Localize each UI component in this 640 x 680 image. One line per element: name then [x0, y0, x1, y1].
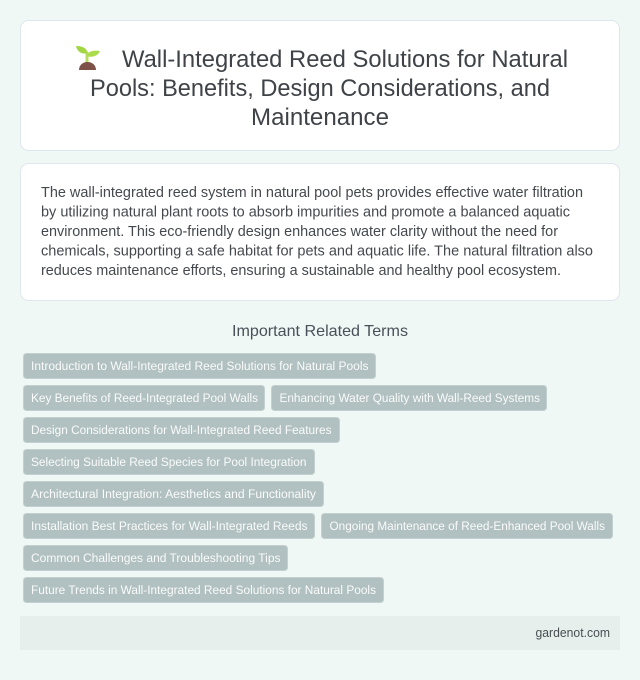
summary paragraph: reduces maintenance efforts, ensuring a sustainable and healthy pool ecosystem.	[41, 263, 561, 279]
tag: introduction	[24, 354, 376, 378]
heading: important related terms: Important Related Terms	[232, 323, 408, 340]
tag: key benefits	[24, 386, 264, 410]
tag: reed species	[24, 450, 314, 474]
icon: seedling	[76, 46, 100, 70]
tag: design considerations	[24, 418, 340, 442]
footer bar	[20, 616, 620, 650]
summary paragraph: environment. This eco-friendly design enhances water clarity without the need for	[41, 224, 558, 240]
summary paragraph	[41, 185, 593, 279]
tag: installation	[24, 514, 314, 538]
panel: summary card	[20, 164, 620, 300]
panel: title card	[20, 20, 620, 150]
title text: Wall-Integrated Reed Solutions for Natural	[122, 46, 568, 73]
footer source: gardenot.com	[536, 626, 610, 640]
tag: reed species: Selecting Suitable Reed Species for Pool Integration	[31, 455, 306, 469]
title text	[90, 46, 568, 131]
tag: installation: Installation Best Practices for Wall-Integrated Reeds	[31, 519, 308, 533]
tag: design considerations: Design Considerations for Wall-Integrated Reed Features	[31, 423, 332, 437]
tag: architectural integration: Architectural Integration: Aesthetics and Functionality	[31, 487, 317, 501]
tag: ongoing maintenance: Ongoing Maintenance of Reed-Enhanced Pool Walls	[330, 519, 605, 533]
tag: ongoing maintenance	[322, 514, 612, 538]
title text: Pools: Benefits, Design Considerations, and	[90, 75, 550, 102]
title text: Maintenance	[251, 104, 389, 131]
tag: introduction: Introduction to Wall-Integrated Reed Solutions for Natural Pools	[31, 359, 368, 373]
tag: water quality	[272, 386, 546, 410]
summary paragraph: The wall-integrated reed system in natural pool pets provides effective water filtration	[41, 185, 583, 201]
summary paragraph: by utilizing natural plant roots to absorb impurities and promote a balanced aquatic	[41, 204, 570, 220]
summary paragraph: chemicals, supporting a safe habitat for pets and aquatic life. The natural filtration also	[41, 244, 593, 260]
tag: challenges: Common Challenges and Troubleshooting Tips	[31, 551, 280, 565]
tag: challenges	[24, 546, 288, 570]
tag list	[24, 354, 612, 602]
tag: water quality: Enhancing Water Quality with Wall-Reed Systems	[280, 391, 540, 405]
tag: key benefits: Key Benefits of Reed-Integrated Pool Walls	[31, 391, 258, 405]
tag: future trends: Future Trends in Wall-Integrated Reed Solutions for Natural Pools	[31, 583, 376, 597]
tag: future trends	[24, 578, 384, 602]
tag: architectural integration	[24, 482, 324, 506]
